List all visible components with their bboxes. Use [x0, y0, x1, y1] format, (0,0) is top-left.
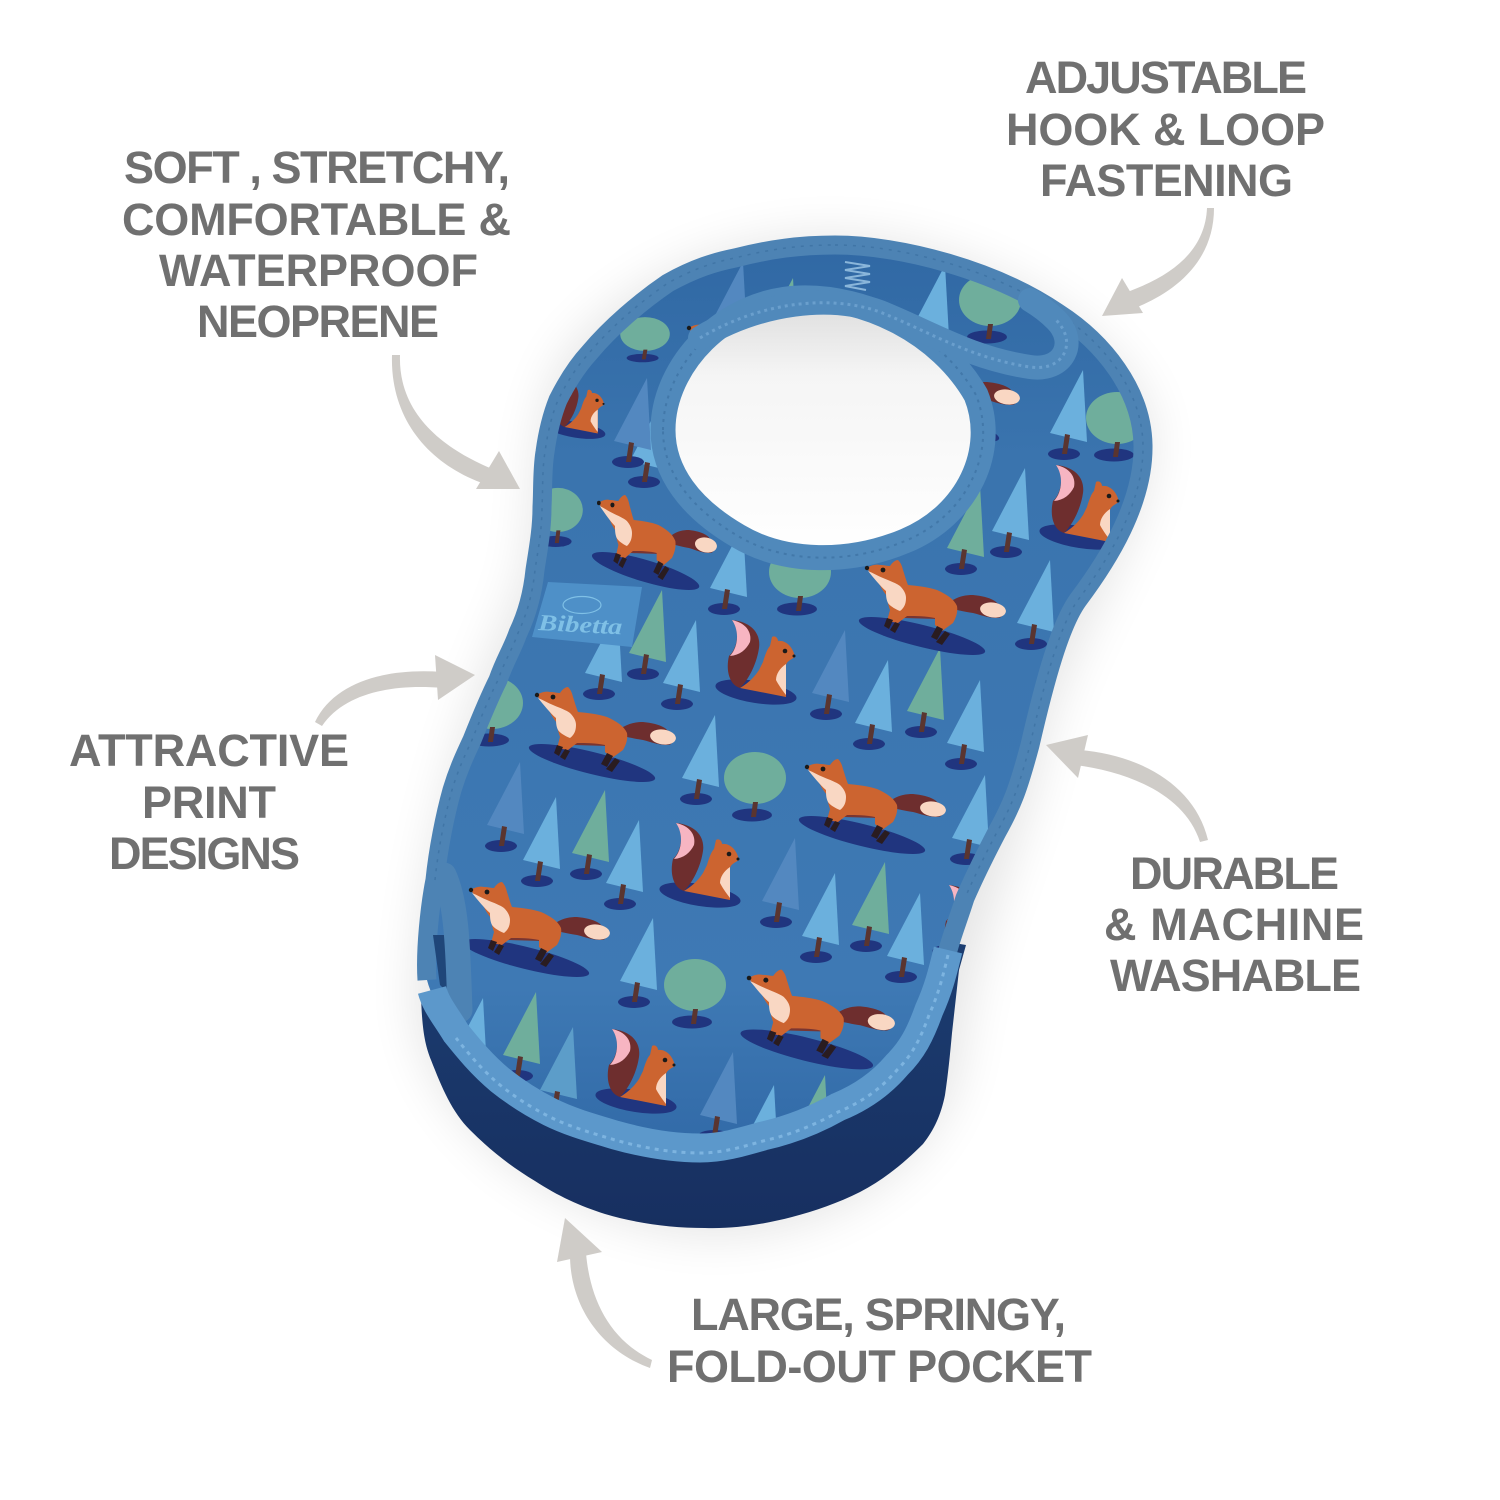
pocket gap [433, 935, 450, 995]
label logo [563, 596, 601, 614]
callout: adjustable fastening: FASTENING [1040, 155, 1293, 206]
arrow: pocket [557, 1218, 652, 1368]
callout: adjustable fastening: HOOK & LOOP [1006, 104, 1325, 155]
neck ring stitching [663, 298, 983, 558]
callout: print designs: DESIGNS [109, 828, 300, 879]
callout: adjustable fastening: ADJUSTABLE [1025, 52, 1307, 103]
callout: neoprene: WATERPROOF [159, 245, 478, 296]
pocket hem [432, 950, 948, 1148]
outer binding [427, 245, 1143, 1010]
callout: neoprene: COMFORTABLE & [122, 194, 511, 245]
print: squirrels [546, 378, 1122, 1118]
label brand name: Bibetta [536, 610, 623, 639]
arrow: neoprene [392, 355, 520, 489]
left fold [444, 875, 460, 1010]
callout: neoprene: SOFT , STRETCHY, [124, 142, 510, 193]
binding stitching [435, 245, 1143, 898]
callout: print designs: ATTRACTIVE [69, 725, 349, 776]
hook and loop strap [700, 300, 1067, 368]
arrow: print designs [315, 655, 475, 726]
callout: neoprene: NEOPRENE [197, 296, 439, 347]
brand label [532, 582, 642, 647]
strap stitching [700, 303, 1067, 368]
callout: pocket: LARGE, SPRINGY, [691, 1289, 1066, 1340]
zigzag stitch [845, 262, 870, 290]
callout: durable [1104, 848, 1364, 1001]
callout: durable: WASHABLE [1110, 950, 1361, 1001]
arrow: machine washable [1046, 735, 1208, 842]
callout: pocket: FOLD-OUT POCKET [667, 1341, 1092, 1392]
callout: print designs [69, 725, 349, 879]
print: trees [448, 262, 1148, 1175]
callout: pocket [667, 1289, 1092, 1392]
bib soft shadow [415, 236, 1152, 1235]
arrow: hook and loop [1102, 208, 1214, 316]
callout: print designs: PRINT [142, 777, 276, 828]
callout: adjustable fastening [1006, 52, 1325, 206]
callout: neoprene [122, 142, 511, 347]
bib product photo [400, 220, 1180, 1228]
print: foxes [460, 320, 1021, 1077]
callout: durable: DURABLE [1130, 848, 1339, 899]
callout: durable: & MACHINE [1104, 899, 1364, 950]
neck opening and ring [663, 298, 983, 558]
hem stitching [456, 955, 948, 1153]
fold-out pocket [421, 900, 966, 1228]
pattern print area [427, 254, 1134, 1134]
